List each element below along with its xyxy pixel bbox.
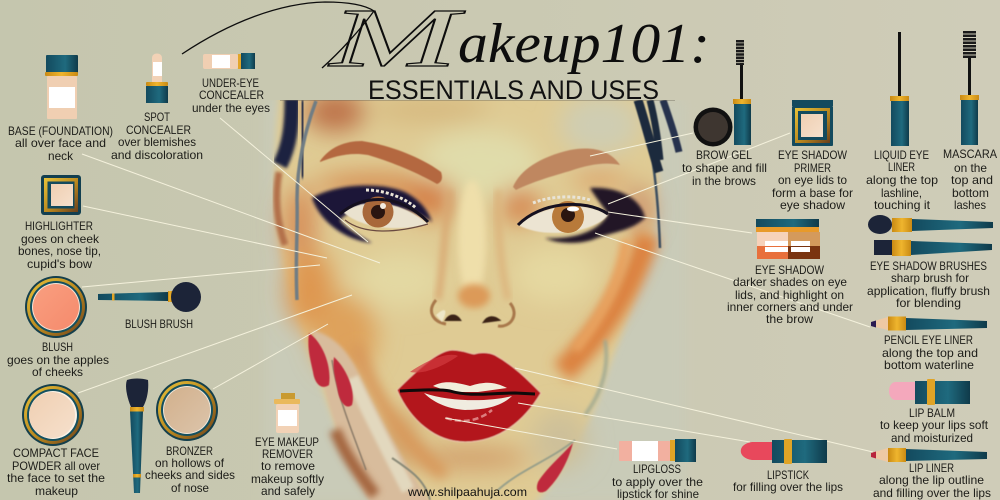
text: highlighter <box>18 219 101 271</box>
text: eye makeup remover: and safely <box>261 484 315 498</box>
icon: liquid liner <box>890 32 909 146</box>
text: foundation: all over face and <box>15 136 106 150</box>
panel: lip liner <box>871 448 991 500</box>
text: eye shadow primer: PRIMER <box>794 161 831 175</box>
title flourish <box>182 2 374 68</box>
text: lipstick <box>733 468 843 494</box>
text: lip liner <box>873 461 991 500</box>
text: bronzer: cheeks and sides <box>145 468 235 482</box>
panel: brow gel <box>682 40 767 188</box>
text: spot concealer <box>111 110 203 162</box>
text: blush: of cheeks <box>32 365 83 379</box>
text: bronzer: on hollows of <box>155 456 225 470</box>
text: highlighter: goes on cheek <box>21 232 100 246</box>
icon: brow gel pot and wand <box>694 40 751 146</box>
panel: eye shadow primer <box>772 100 853 212</box>
text: blush <box>7 340 109 379</box>
text: liquid eye liner: along the top <box>866 173 938 187</box>
text: liquid eye liner <box>866 148 938 212</box>
text: highlighter: HIGHLIGHTER <box>25 219 93 233</box>
text: liquid eye liner: lashline, <box>881 186 922 200</box>
text: brow gel: to shape and fill <box>682 161 767 175</box>
icon: powder brush <box>126 378 148 493</box>
text: compact face powder: POWDER all over <box>12 459 100 473</box>
panel: bronzer <box>145 379 235 495</box>
text: eye makeup remover: EYE MAKEUP <box>255 435 319 449</box>
panel: highlighter <box>18 175 101 271</box>
text: eye shadow primer <box>772 148 853 212</box>
icon: blush compact <box>25 276 87 338</box>
text: lipstick: LIPSTICK <box>767 468 809 482</box>
panel: eye makeup remover <box>251 393 324 498</box>
text: eye shadow primer: form a base for <box>772 186 853 200</box>
icon: lipgloss tube <box>619 439 696 462</box>
text: eye makeup remover: makeup softly <box>251 472 324 486</box>
text: eye shadow primer: eye shadow <box>780 198 845 212</box>
icon: lip balm <box>889 379 970 405</box>
panel: foundation <box>8 55 113 163</box>
text: lip liner: and filling over the lips <box>873 486 991 500</box>
text: bronzer: of nose <box>171 481 209 495</box>
hair left <box>277 98 316 300</box>
title script: akeup101: <box>458 13 710 75</box>
icon: powder compact <box>22 384 84 446</box>
icon: remover bottle <box>274 393 300 433</box>
subtitle: ESSENTIALS AND USES <box>368 75 659 105</box>
left eye <box>312 185 432 243</box>
text: pencil eye liner: along the top and <box>882 346 978 360</box>
icon: bronzer compact <box>156 379 218 441</box>
icon: pencil liner <box>871 316 987 330</box>
left eyebrow <box>320 141 442 184</box>
text: eye makeup remover: REMOVER <box>262 447 313 461</box>
text: highlighter: bones, nose tip, <box>18 244 101 258</box>
text: foundation <box>8 124 113 163</box>
illustration: painted face <box>265 92 685 500</box>
text: eye shadow primer: on eye lids to <box>778 173 847 187</box>
text: blush: BLUSH <box>42 340 73 354</box>
text: mascara: lashes <box>954 198 986 212</box>
text: eye shadow brushes: for blending <box>896 296 961 310</box>
panel: eye shadow brushes <box>867 215 993 310</box>
panel: blush brush <box>98 282 201 331</box>
text: foundation: BASE (FOUNDATION) <box>8 124 113 138</box>
text: eye shadow: lids, and highlight on <box>735 288 844 302</box>
text: lipgloss: LIPGLOSS <box>633 462 681 476</box>
panel: eye shadow <box>727 219 853 326</box>
panel: mascara <box>943 31 997 212</box>
cheek contour right <box>562 235 648 372</box>
panel: under-eye concealer <box>192 53 270 115</box>
text: brow gel: in the brows <box>692 174 756 188</box>
text: eye shadow brushes <box>867 259 990 310</box>
text: blush: goes on the apples <box>7 353 109 367</box>
text: spot concealer: over blemishes <box>118 135 196 149</box>
icon: fluffy brush <box>868 215 993 234</box>
text: blush brush: BLUSH BRUSH <box>125 317 193 331</box>
text: liquid eye liner: LIQUID EYE <box>874 148 929 162</box>
soft colour contouring <box>284 92 652 470</box>
text: under-eye concealer <box>192 76 270 115</box>
text: under-eye concealer: CONCEALER <box>199 88 264 102</box>
icon: lipstick <box>741 439 827 464</box>
text: foundation: neck <box>48 149 74 163</box>
text: lipstick: for filling over the lips <box>733 480 843 494</box>
text: eye makeup remover <box>251 435 324 498</box>
text: spot concealer: CONCEALER <box>126 123 191 137</box>
panel: spot concealer <box>111 54 203 162</box>
pointer lines from products to face <box>78 118 873 452</box>
text: eye shadow: EYE SHADOW <box>755 263 825 277</box>
nails <box>308 333 573 492</box>
panel: compact face powder <box>7 384 105 498</box>
panel: lip balm <box>880 379 989 445</box>
text: mascara: bottom <box>952 186 989 200</box>
panel: liquid eye liner <box>866 32 938 212</box>
text: lip liner: LIP LINER <box>909 461 954 475</box>
icon: primer jar <box>792 100 833 146</box>
backdrop glow behind face <box>265 100 685 500</box>
text: brow gel: BROW GEL <box>696 148 752 162</box>
text: mascara: top and <box>951 173 993 187</box>
text: lip balm: and moisturized <box>891 431 973 445</box>
text: under-eye concealer: UNDER-EYE <box>202 76 259 90</box>
text: compact face powder <box>7 446 105 498</box>
text: eye makeup remover: to remove <box>261 459 315 473</box>
jaw contour left <box>355 345 445 475</box>
panel: lipstick <box>733 439 843 494</box>
text: eye shadow: inner corners and under <box>727 300 853 314</box>
right eyebrow <box>513 149 620 190</box>
icon: sharp brush <box>874 240 992 256</box>
text: mascara: on the <box>954 161 987 175</box>
nose <box>431 300 514 326</box>
text: pencil eye liner: bottom waterline <box>884 358 974 372</box>
text: bronzer <box>145 444 235 495</box>
text: compact face powder: makeup <box>35 484 78 498</box>
top edge shadow <box>280 100 675 101</box>
text: lipgloss: to apply over the <box>612 475 703 489</box>
text: eye shadow <box>727 263 853 326</box>
text: compact face powder: COMPACT FACE <box>13 446 99 460</box>
text: spot concealer: SPOT <box>144 110 171 124</box>
url: www.shilpaahuja.com <box>407 485 527 499</box>
face base tone <box>275 92 658 500</box>
icon: spot concealer <box>146 54 168 103</box>
panel: blush <box>7 276 109 379</box>
text: bronzer: BRONZER <box>166 444 213 458</box>
icon: lip pencil <box>871 448 987 462</box>
icon: under-eye concealer <box>203 53 255 69</box>
panel: lipgloss <box>612 439 703 500</box>
icon: foundation bottle <box>45 55 78 119</box>
right eye <box>518 188 645 243</box>
text: spot concealer: and discoloration <box>111 148 203 162</box>
text: pencil eye liner <box>882 333 978 372</box>
hand <box>312 330 606 500</box>
text: lip liner: along the lip outline <box>879 473 984 487</box>
text: eye shadow primer: EYE SHADOW <box>778 148 848 162</box>
text: mascara <box>943 147 997 212</box>
panel: pencil eye liner <box>871 316 987 372</box>
text: brow gel <box>682 148 767 188</box>
text: compact face powder: the face to set the <box>7 471 105 485</box>
lips <box>397 350 541 442</box>
text: eye shadow brushes: application, fluffy brush <box>867 284 990 298</box>
text: lip balm: LIP BALM <box>909 406 955 420</box>
text: liquid eye liner: LINER <box>888 160 915 174</box>
text: lipgloss <box>612 462 703 500</box>
text: eye shadow brushes: sharp brush for <box>891 271 969 285</box>
icon: blush brush <box>98 282 201 312</box>
hair right <box>637 100 679 248</box>
text: liquid eye liner: touching it <box>874 198 931 212</box>
icon: eye shadow palette <box>756 219 820 259</box>
text: pencil eye liner: PENCIL EYE LINER <box>884 333 973 347</box>
text: lip balm: to keep your lips soft <box>880 418 989 432</box>
title <box>182 0 710 105</box>
text: lip balm <box>880 406 989 445</box>
text: eye shadow: the brow <box>766 312 813 326</box>
nose highlight and shade <box>458 180 486 300</box>
text: highlighter: cupid's bow <box>27 257 92 271</box>
text: under-eye concealer: under the eyes <box>192 101 270 115</box>
icon: mascara <box>960 31 979 145</box>
icon: highlighter compact <box>41 175 81 215</box>
text: eye shadow: darker shades on eye <box>733 275 847 289</box>
